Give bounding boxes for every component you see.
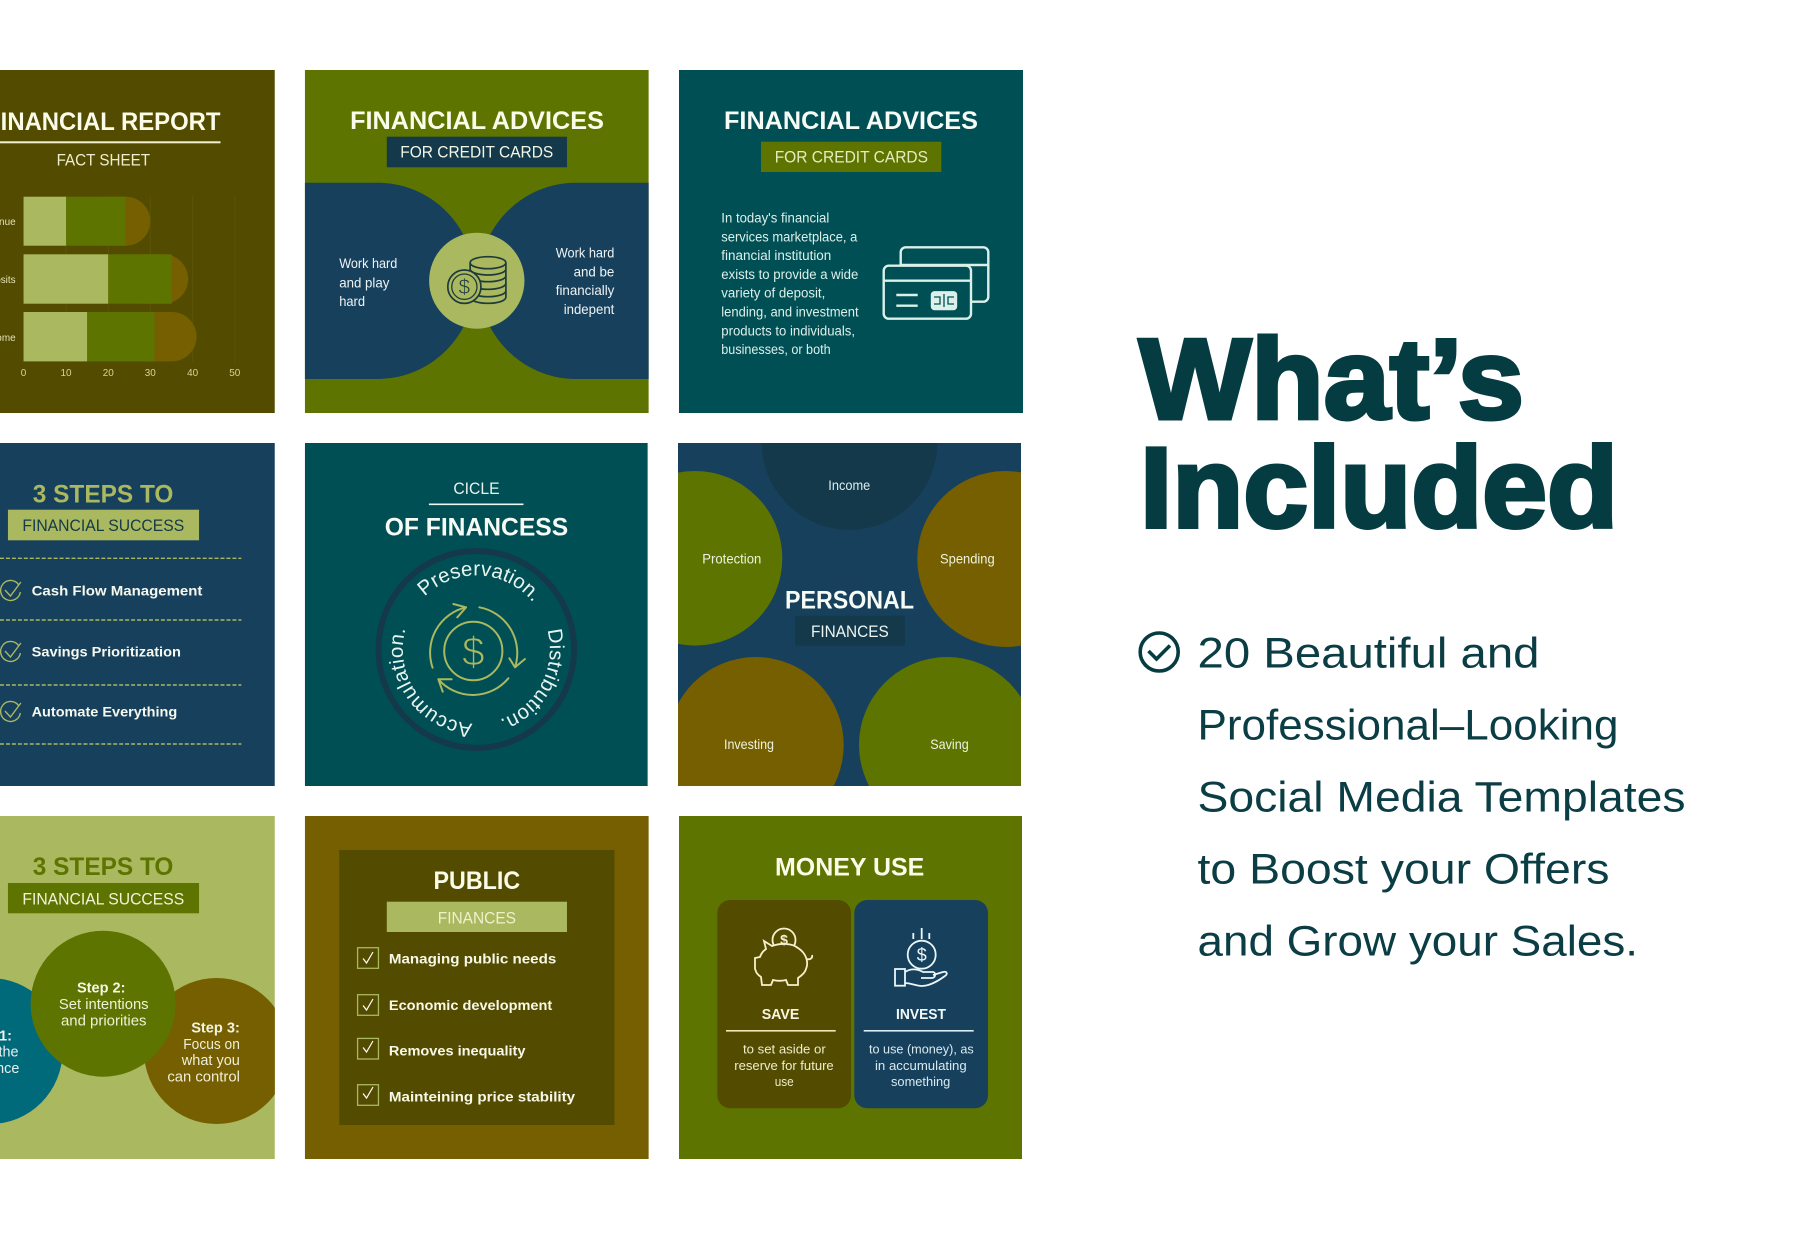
checklist item: savings prioritization <box>1 641 181 661</box>
heading: of financess: OF FINANCESS <box>385 514 568 542</box>
label: finances: FINANCES <box>438 908 516 927</box>
panel: three steps checklist <box>0 443 275 786</box>
text: feature description <box>1198 629 1686 966</box>
checklist item: managing public needs: Managing public needs <box>389 950 557 966</box>
heading: public: PUBLIC <box>433 867 520 895</box>
panel: money use <box>679 816 1022 1159</box>
subheading: cicle: CICLE <box>453 479 500 498</box>
text: feature description: 20 Beautiful and <box>1198 629 1540 677</box>
text: save definition: reserve for future <box>734 1058 834 1073</box>
checklist item: managing public needs <box>358 948 557 968</box>
label: financial success <box>8 883 199 913</box>
text: feature description: Professional–Looking <box>1198 701 1618 749</box>
heading: 3 steps to: 3 STEPS TO <box>33 853 173 881</box>
text: invest definition <box>869 1041 974 1089</box>
icon: hand holding coin <box>895 928 947 986</box>
text: work hard and play hard: and play <box>339 275 390 290</box>
icon: hand holding coin: $ <box>917 945 927 965</box>
text: work hard and be financially independent <box>556 245 615 317</box>
heading: personal: PERSONAL <box>785 586 914 614</box>
label: for credit cards: FOR CREDIT CARDS <box>775 148 928 167</box>
text: feature description: and Grow your Sales. <box>1198 918 1638 966</box>
panel: three steps bubbles <box>0 816 289 1159</box>
body text <box>721 210 859 357</box>
checklist item: cash flow management <box>1 580 203 600</box>
body text: lending, and investment <box>721 305 859 320</box>
text: save definition <box>734 1041 834 1089</box>
step 3 bubble: can control <box>167 1070 240 1086</box>
inner card <box>339 850 614 1125</box>
step 3 bubble: Step 3: <box>191 1020 240 1036</box>
title: what's included <box>1139 317 1618 552</box>
step 2 bubble <box>31 931 176 1077</box>
card: save <box>717 900 851 1108</box>
circle labels: Spending <box>940 550 995 566</box>
body text: products to individuals, <box>721 323 855 338</box>
text: save definition: to set aside or <box>743 1041 826 1056</box>
panel: circle of finances <box>304 443 648 786</box>
body text: variety of deposit, <box>721 286 825 301</box>
icon: coin stack <box>429 233 524 329</box>
label: finances <box>795 616 905 646</box>
text: work hard and be financially independent: indepent <box>564 302 615 317</box>
bar chart: 30 <box>145 368 156 379</box>
step 3 bubble <box>145 978 275 1124</box>
right blue lobe <box>479 183 649 379</box>
circular diagram <box>376 548 577 751</box>
step 2 bubble: Step 2: <box>77 980 125 996</box>
label: financial success <box>8 510 199 540</box>
text: work hard and play hard <box>339 256 397 309</box>
checklist item: removes inequality <box>358 1038 526 1059</box>
step 2 bubble: and priorities <box>61 1014 147 1030</box>
checklist item: removes inequality: Removes inequality <box>389 1043 526 1059</box>
circular diagram: Preservation. <box>416 564 535 602</box>
text: save definition: use <box>775 1074 794 1089</box>
checklist item: savings prioritization: Savings Prioritization <box>32 644 181 660</box>
text: work hard and be financially independent: Work hard <box>556 245 614 260</box>
bar chart: 0 <box>21 368 27 379</box>
panel: financial advices with credit card <box>679 70 1023 413</box>
circle labels <box>702 477 995 752</box>
bar chart: 40 <box>187 368 199 379</box>
label: save: SAVE <box>762 1006 799 1023</box>
bar chart: 20 <box>103 368 114 379</box>
icon: check circle <box>1140 633 1178 671</box>
body text: businesses, or both <box>721 342 831 357</box>
step 1 bubble <box>0 978 63 1124</box>
bar chart <box>0 196 241 379</box>
checklist item: automate everything <box>1 701 177 721</box>
text: invest definition: in accumulating <box>875 1058 967 1073</box>
body text: In today's financial <box>721 210 829 225</box>
checklist item: economic development: Economic development <box>389 997 553 1013</box>
circle labels: Income <box>828 477 870 493</box>
text: work hard and play hard: hard <box>339 294 365 309</box>
text: work hard and be financially independent: financially <box>556 283 615 298</box>
checklist item: automate everything: Automate Everything <box>32 704 177 720</box>
heading: financial advices: FINANCIAL ADVICES <box>350 107 604 135</box>
circles: five finance topics <box>678 443 1021 786</box>
label: invest: INVEST <box>896 1006 946 1023</box>
title: what's included: What’s <box>1139 317 1524 444</box>
label: financial success: FINANCIAL SUCCESS <box>22 889 184 908</box>
title: what's included: Included <box>1140 425 1618 552</box>
checklist item: maintaining price stability: Mainteining price stability <box>389 1089 575 1105</box>
panel: financial report fact sheet <box>0 70 275 413</box>
checklist item: cash flow management: Cash Flow Management <box>32 583 203 599</box>
panel: personal finances <box>678 443 1021 786</box>
body text: financial institution <box>721 248 831 263</box>
label: finances <box>387 902 567 932</box>
circle labels: Protection <box>702 550 761 566</box>
circle labels: Investing <box>724 736 774 752</box>
label: for credit cards <box>761 142 941 172</box>
checklist item: economic development <box>358 995 553 1015</box>
label: finances: FINANCES <box>811 622 889 641</box>
icon: coin stack: $ <box>459 276 471 299</box>
circular diagram: Distribution. <box>501 629 565 726</box>
panel: public finances <box>305 816 649 1159</box>
text: feature description: to Boost your Offers <box>1198 846 1610 894</box>
step 2 bubble: Set intentions <box>59 997 149 1013</box>
step 3 bubble: what you <box>181 1053 240 1069</box>
icon: piggy bank: $ <box>780 932 788 948</box>
circle labels: Saving <box>930 736 969 752</box>
text: invest definition: something <box>891 1074 950 1089</box>
text: invest definition: to use (money), as <box>869 1041 974 1056</box>
heading: money use: MONEY USE <box>775 854 924 882</box>
heading: 3 steps to: 3 STEPS TO <box>33 480 173 508</box>
bar chart: 50 <box>229 368 241 379</box>
text: work hard and play hard: Work hard <box>339 256 397 271</box>
label: financial success: FINANCIAL SUCCESS <box>22 516 184 535</box>
icon: credit cards <box>884 247 988 319</box>
body text: exists to provide a wide <box>721 267 858 282</box>
subheading: fact sheet: FACT SHEET <box>57 151 150 170</box>
bar chart: 10 <box>61 368 72 379</box>
panel: financial advices with center coin <box>305 70 649 413</box>
label: for credit cards <box>387 137 567 167</box>
body text: services marketplace, a <box>721 229 858 244</box>
step 3 bubble: Focus on <box>183 1037 240 1053</box>
icon: piggy bank <box>755 928 812 985</box>
label: for credit cards: FOR CREDIT CARDS <box>400 143 553 162</box>
card: invest <box>854 900 988 1108</box>
left blue lobe <box>305 183 475 379</box>
icon: dollar with cycle arrows: $ <box>462 628 485 675</box>
icon: dollar with cycle arrows <box>430 604 525 695</box>
text: work hard and be financially independent: and be <box>574 264 614 279</box>
text: feature description: Social Media Templates <box>1198 774 1686 822</box>
circular diagram: Accumulation. <box>388 630 472 737</box>
checklist item: maintaining price stability <box>358 1085 575 1105</box>
heading: financial advices: FINANCIAL ADVICES <box>724 107 978 135</box>
